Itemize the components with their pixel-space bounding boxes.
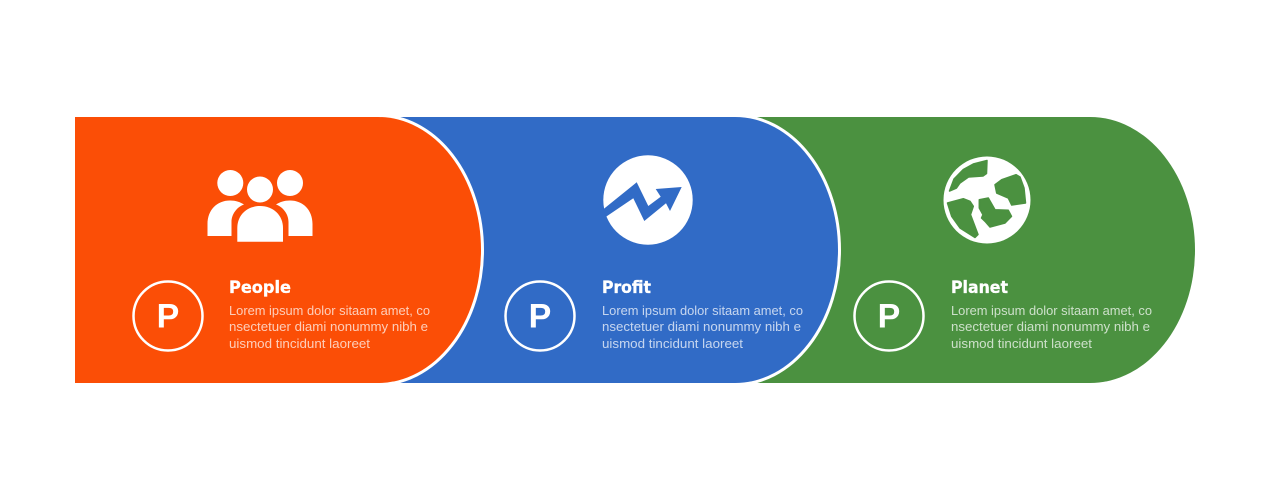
panel: profit — [350, 117, 838, 383]
icon: letter circle people — [134, 282, 202, 350]
heading: planet: Planet — [951, 278, 1008, 297]
text block: planet: Lorem ipsum dolor sitaam amet, co — [951, 304, 1152, 318]
text block: profit: Lorem ipsum dolor sitaam amet, co — [602, 304, 803, 318]
icon: letter circle planet — [854, 282, 924, 350]
letter profit: P — [529, 298, 551, 336]
panel: people — [75, 117, 481, 383]
heading: profit: Profit — [602, 278, 651, 297]
text block: people: uismod tincidunt laoreet — [229, 337, 370, 351]
letter people: P — [157, 298, 179, 336]
icon: letter circle profit — [506, 282, 574, 350]
text block: profit — [602, 304, 803, 351]
icon: people group — [208, 170, 312, 242]
text block: people: nsectetuer diami nonummy nibh e — [229, 320, 428, 334]
text block: planet: uismod tincidunt laoreet — [951, 337, 1092, 351]
text block: people — [229, 304, 430, 351]
letter planet: P — [878, 298, 900, 336]
icon: globe — [944, 156, 1030, 244]
icon: growth arrow — [603, 155, 693, 245]
text block: people: Lorem ipsum dolor sitaam amet, co — [229, 304, 430, 318]
panel: planet — [700, 117, 1195, 383]
text block: planet: nsectetuer diami nonummy nibh e — [951, 320, 1150, 334]
text block: profit: nsectetuer diami nonummy nibh e — [602, 320, 801, 334]
heading: people: People — [229, 278, 291, 297]
text block: planet — [951, 304, 1152, 351]
text block: profit: uismod tincidunt laoreet — [602, 337, 743, 351]
